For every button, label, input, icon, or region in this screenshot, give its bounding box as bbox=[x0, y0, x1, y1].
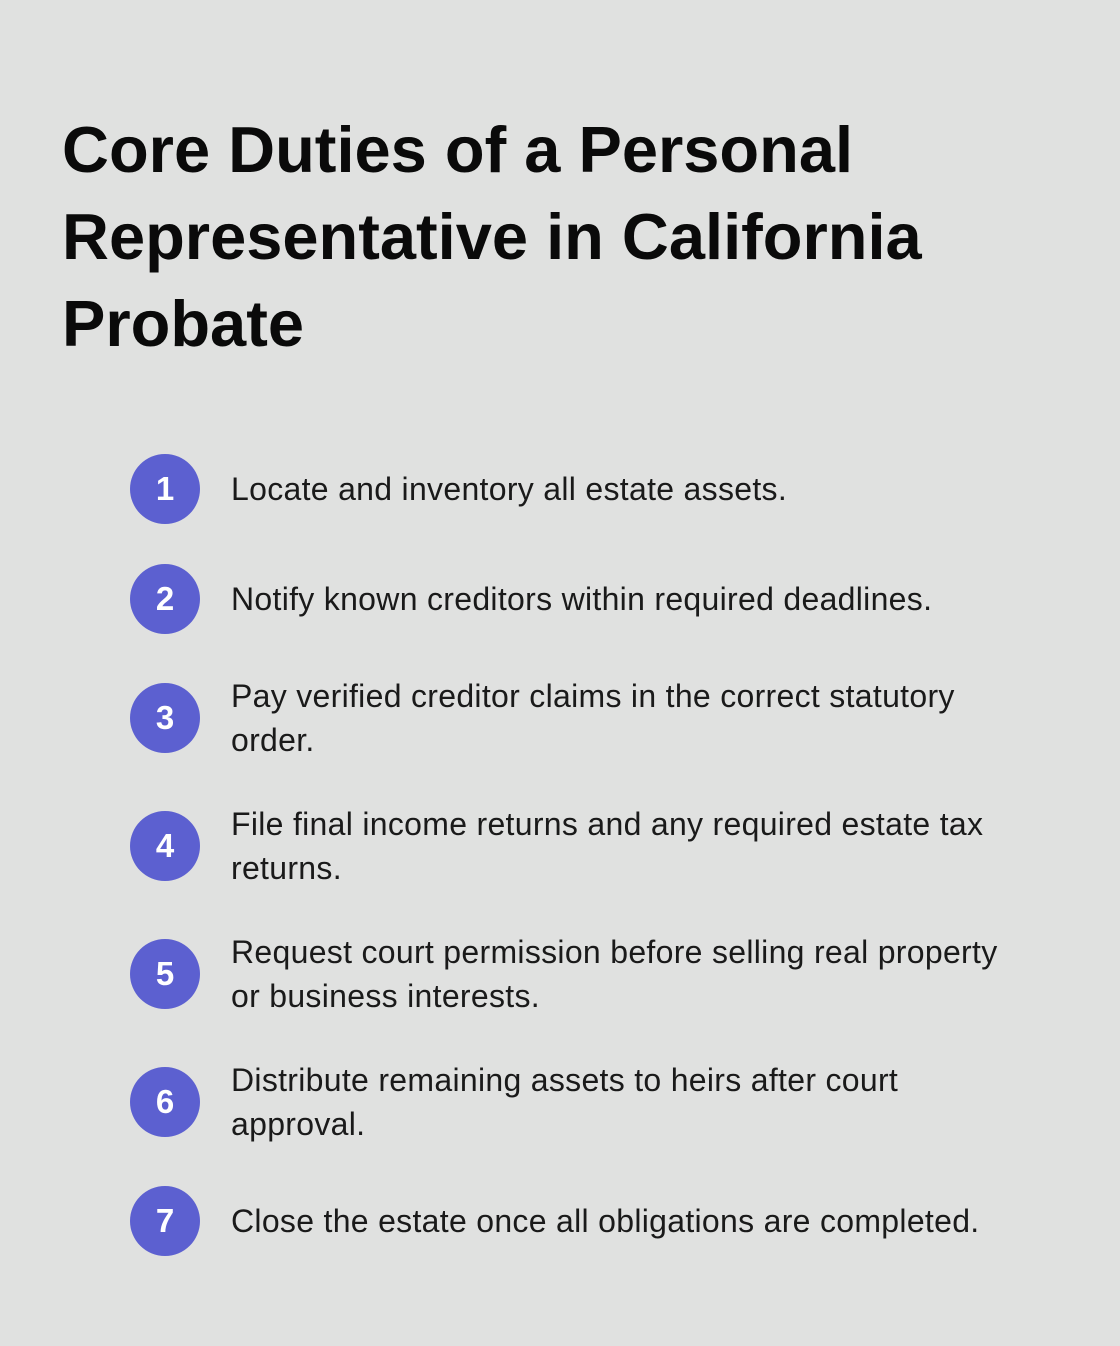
item 3 bbox=[130, 678, 955, 758]
item 2: 2 bbox=[156, 580, 174, 617]
item 5: 5 bbox=[156, 955, 174, 992]
title: Probate bbox=[62, 287, 304, 360]
item 6: 6 bbox=[156, 1083, 174, 1120]
item 3: order. bbox=[231, 722, 315, 758]
item 4: File final income returns and any required estate tax bbox=[231, 806, 983, 842]
item 3: 3 bbox=[156, 699, 174, 736]
item 5: or business interests. bbox=[231, 978, 540, 1014]
item 1 bbox=[130, 454, 787, 524]
item 7: Close the estate once all obligations are completed. bbox=[231, 1203, 980, 1239]
item 4: returns. bbox=[231, 850, 342, 886]
item 4: 4 bbox=[156, 827, 174, 864]
item 7: 7 bbox=[156, 1202, 174, 1239]
item 6 bbox=[130, 1062, 898, 1142]
title: Representative in California bbox=[62, 200, 922, 273]
item 2: Notify known creditors within required deadlines. bbox=[231, 581, 932, 617]
item 5: Request court permission before selling real property bbox=[231, 934, 998, 970]
item 4 bbox=[130, 806, 983, 886]
title bbox=[62, 113, 922, 360]
item 1: 1 bbox=[156, 470, 174, 507]
item 2 bbox=[130, 564, 932, 634]
item 6: Distribute remaining assets to heirs after court bbox=[231, 1062, 898, 1098]
item 6: approval. bbox=[231, 1106, 365, 1142]
title: Core Duties of a Personal bbox=[62, 113, 853, 186]
item 7 bbox=[130, 1186, 980, 1256]
item 1: Locate and inventory all estate assets. bbox=[231, 471, 787, 507]
item 5 bbox=[130, 934, 998, 1014]
item 3: Pay verified creditor claims in the correct statutory bbox=[231, 678, 955, 714]
